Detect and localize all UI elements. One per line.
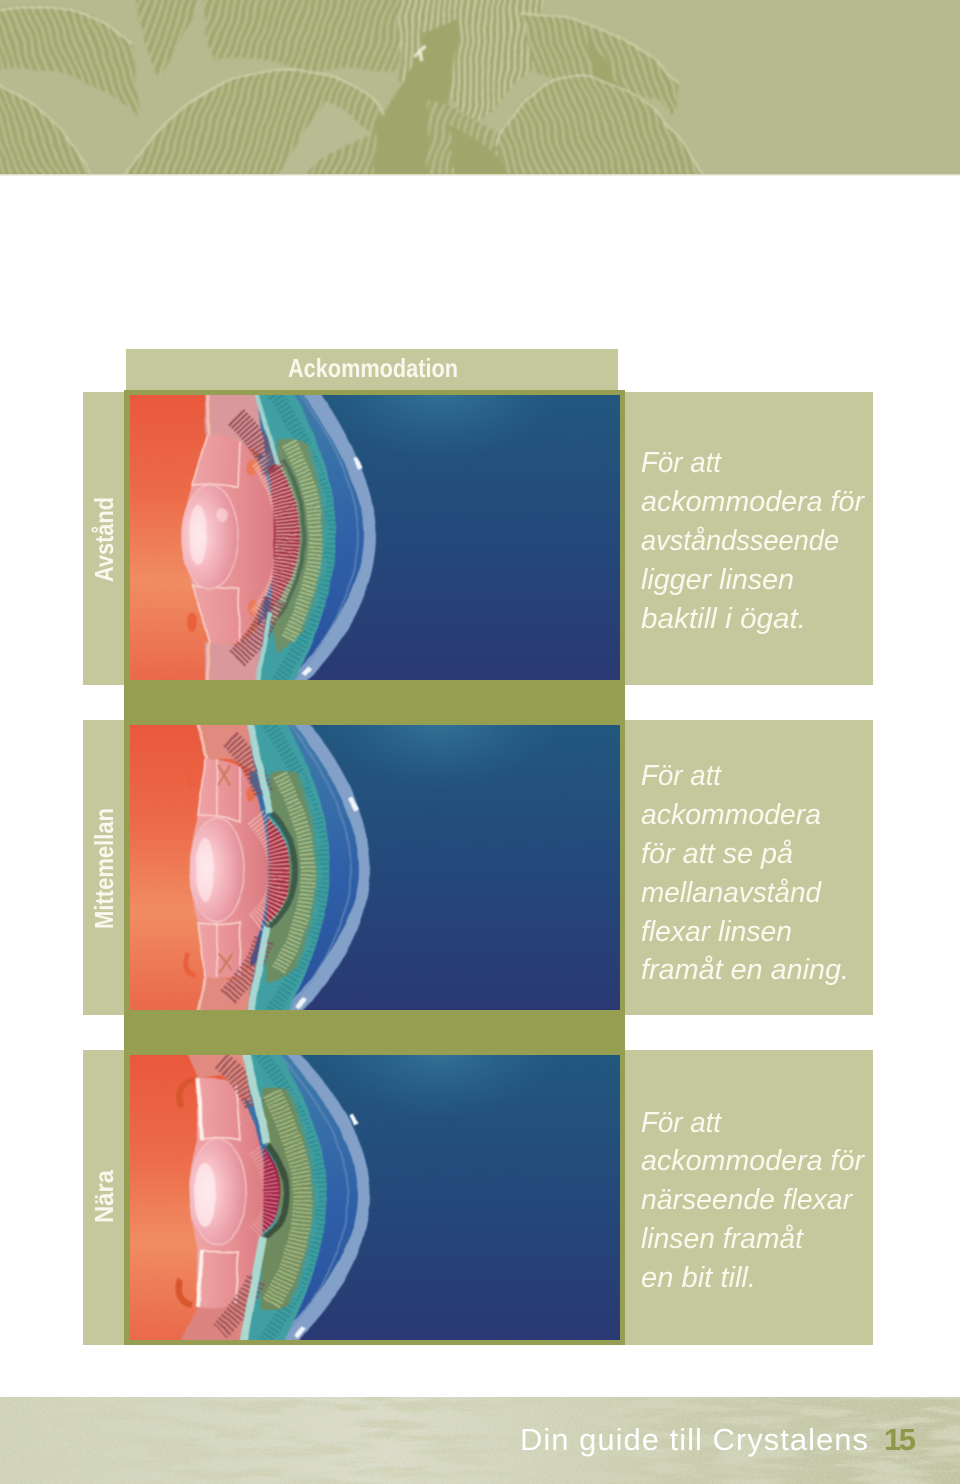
frond rachis highlights [0,7,712,190]
text panel: near: För att [641,1107,723,1139]
frond upper right [520,15,678,114]
text panel: distance: ligger linsen [641,564,794,596]
frond centre upper [400,0,545,130]
trunk [373,19,459,174]
gap in frond A [277,100,370,174]
row label: Nära [83,1050,124,1345]
text panel: intermediate: för att se på [641,838,793,870]
text panel: near: linsen framåt [641,1223,805,1255]
row label: Mittemellan [83,720,124,1015]
text panel: near [625,1050,873,1345]
frond B [496,79,702,174]
text panel: intermediate: mellanavstånd [641,877,822,909]
row label: Mittemellan: Mittemellan [89,808,119,929]
text panel: distance: baktill i ögat. [641,603,806,635]
text panel: near: närseende flexar [641,1184,853,1216]
frond fan top [205,0,420,70]
text panel: distance: För att [641,447,723,479]
olive frame [124,390,625,1345]
text panel: intermediate: För att [641,760,723,792]
frond top centre [136,0,198,76]
text panel: distance: avståndsseende [641,525,839,557]
heading bar: Ackommodation: Ackommodation [288,353,458,383]
frond left low [0,86,90,174]
text panel: intermediate [625,720,873,1015]
text panel: intermediate: ackommodera [641,799,821,831]
frond centre low [426,100,504,174]
eye illustration: distance [124,385,626,685]
eye illustration: near [124,1045,626,1345]
frond A [128,70,382,174]
palm header band [0,0,960,190]
row label: Avstånd [83,392,124,685]
text panel: intermediate: flexar linsen [641,916,792,948]
page number: 15 [884,1422,916,1457]
eye illustration: intermediate [124,715,626,1015]
text panel: distance: ackommodera för [641,486,865,518]
heading bar: Ackommodation [126,349,618,390]
footer title: Din guide till Crystalens [520,1422,868,1457]
row label: Avstånd: Avstånd [89,497,119,582]
row label: Nära: Nära [89,1170,119,1223]
text panel: near: en bit till. [641,1262,756,1294]
text panel: distance [625,392,873,685]
frond top left [0,5,140,118]
text panel: intermediate: framåt en aning. [641,954,849,986]
text panel: near: ackommodera för [641,1145,865,1177]
footer band [0,1397,960,1484]
